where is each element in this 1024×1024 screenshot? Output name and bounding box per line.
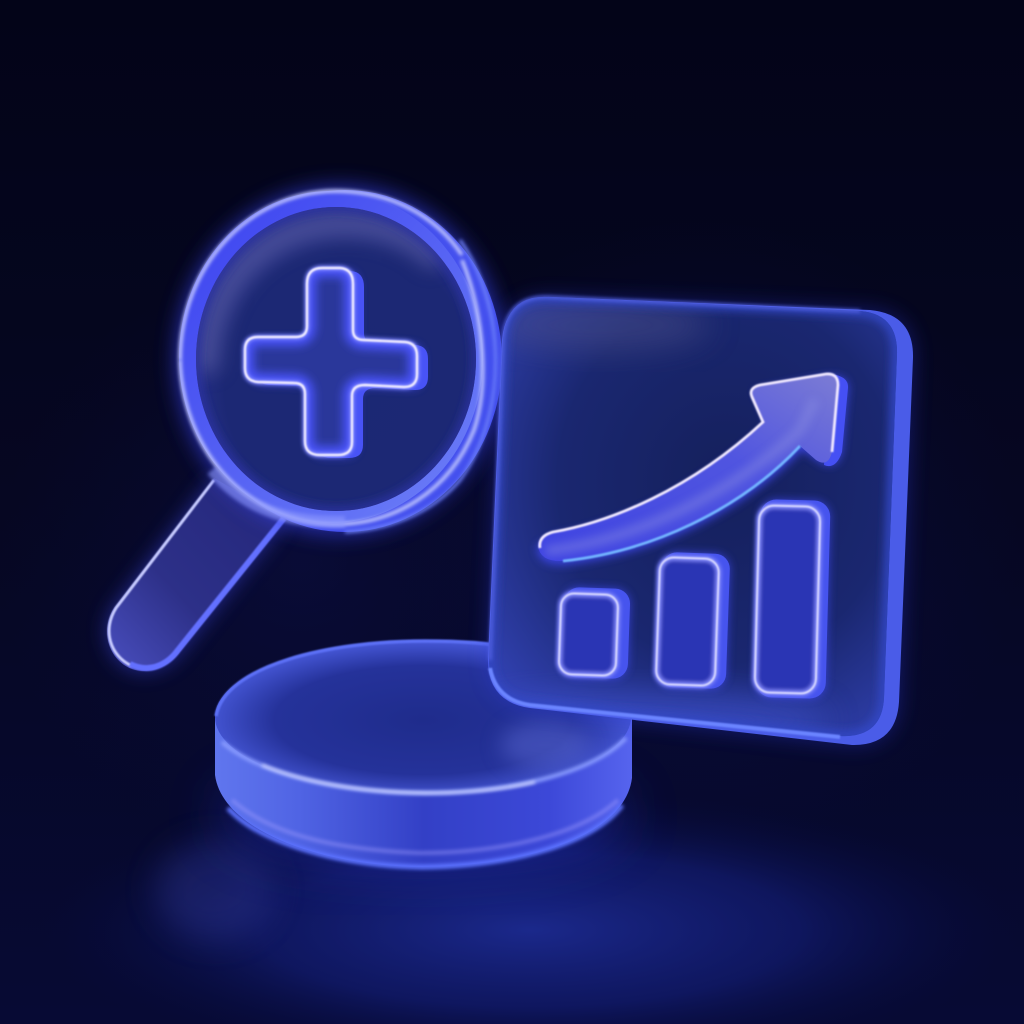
disc top face [215, 641, 631, 793]
lens inner face [196, 207, 476, 511]
bar tall [755, 499, 831, 699]
magnifying glass [107, 185, 505, 671]
lens back edge [188, 190, 502, 532]
growth arrow [537, 374, 848, 565]
card face [489, 297, 897, 736]
lens rim [179, 191, 483, 523]
bar medium [656, 552, 730, 689]
lens glow [175, 185, 505, 535]
floor glow [0, 220, 1020, 1024]
chart card [450, 297, 913, 748]
bar small [559, 587, 631, 679]
handle [107, 478, 286, 671]
podium disc [215, 641, 632, 867]
disc side wall [215, 718, 632, 867]
card back edge [488, 297, 913, 745]
plus icon [245, 268, 428, 458]
